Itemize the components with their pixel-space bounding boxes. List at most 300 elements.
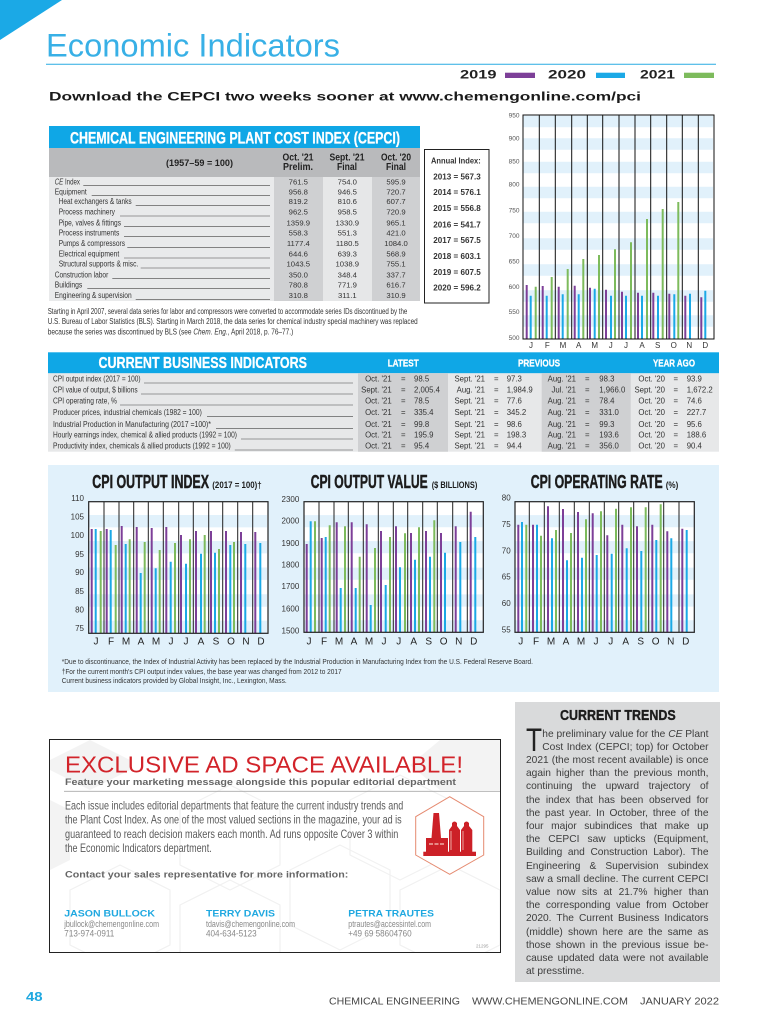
- year ago values: 74.6: [687, 396, 702, 406]
- latest values: 335.4: [414, 408, 434, 417]
- ad subhead: Feature your marketing message alongside this popular editorial department: [65, 777, 456, 787]
- CEPCI heading: CHEMICAL ENGINEERING PLANT COST INDEX (CEPCI): [70, 128, 400, 147]
- index values: 639.3: [338, 250, 357, 259]
- y axis labels: 550: [509, 309, 520, 316]
- annual index box: 2013 = 567.3: [433, 172, 481, 182]
- trends body text: cause updated data were not available: [526, 953, 708, 964]
- CEPCI footnote: because the series was discontinued by BLS (see Chem. Eng., April 2018, p. 76–77.): [48, 328, 294, 337]
- y axis labels: 80: [502, 493, 511, 502]
- x axis labels: J: [94, 636, 98, 648]
- index values: 421.0: [386, 228, 406, 237]
- legend: 2021: [640, 68, 675, 82]
- x axis labels: J: [518, 636, 523, 648]
- indicator labels: Productivity index, chemicals & allied products (1992 = 100): [53, 442, 231, 450]
- drop cap: T: [526, 722, 542, 758]
- x axis labels: D: [702, 341, 708, 350]
- x axis labels: [518, 636, 689, 648]
- previous values: two months back: Aug. '21: [548, 430, 576, 440]
- 2020 bars: [531, 289, 705, 339]
- x axis labels: M: [335, 636, 343, 648]
- index values: 965.1: [386, 218, 406, 227]
- x axis labels: O: [227, 636, 235, 648]
- index values: 754.0: [338, 177, 357, 186]
- x axis labels: D: [682, 636, 689, 648]
- trends body text: Cost Index (CEPCI; top) for October: [542, 742, 708, 753]
- latest values: 95.4: [414, 442, 430, 450]
- business indicators heading: CURRENT BUSINESS INDICATORS: [98, 355, 307, 372]
- icon: factory in hexagon: [416, 797, 484, 874]
- index values: 558.3: [289, 228, 308, 237]
- x axis labels: O: [440, 636, 448, 648]
- x axis labels: [529, 341, 708, 350]
- latest values: Oct. '21: [365, 396, 392, 406]
- index values: 810.6: [338, 197, 357, 206]
- previous values: one month back: =: [494, 408, 499, 417]
- previous values: two months back: Aug. '21: [548, 442, 576, 450]
- y axis labels: 105: [71, 513, 85, 522]
- x axis labels: N: [242, 636, 250, 648]
- column headings: LATEST: [388, 358, 419, 370]
- y axis labels: 1600: [282, 604, 300, 614]
- x axis labels: N: [455, 636, 462, 648]
- previous values: two months back: 1,966.0: [599, 386, 626, 394]
- chart: CPI operating rate: [502, 472, 694, 648]
- indicator labels: Hourly earnings index, chemical & allied products (1992 = 100): [53, 430, 237, 440]
- x axis labels: N: [686, 341, 692, 350]
- trends body text: the CEPCI saw upticks (Equipment,: [526, 834, 708, 845]
- ad body text: guaranteed to reach decision makers each month. Ad runs opposite Cover 3 within: [65, 827, 398, 841]
- row labels: Structural supports & misc.: [59, 260, 138, 269]
- previous values: two months back: Aug. '21: [548, 420, 576, 429]
- index values: 1330.9: [336, 218, 359, 227]
- contact: Jason Bullock: [64, 909, 159, 939]
- year ago values: [634, 374, 713, 450]
- contact: Terry Davis: TERRY DAVIS: [206, 909, 275, 919]
- contact: Jason Bullock: 713-974-0911: [64, 929, 114, 939]
- trends body text: Building and Construction Labor). The: [526, 847, 708, 858]
- previous values: one month back: [454, 374, 533, 450]
- y axis labels: 60: [502, 599, 511, 608]
- previous values: one month back: 198.3: [507, 430, 526, 440]
- row labels: CE Index: [55, 177, 80, 186]
- previous values: two months back: =: [585, 386, 590, 394]
- index values: 720.9: [386, 208, 406, 217]
- y axis labels: 70: [502, 547, 511, 556]
- x axis labels: M: [122, 636, 130, 648]
- index values: 771.9: [338, 280, 357, 289]
- 2019 bars: [527, 285, 701, 339]
- contact prompt: Contact your sales representative for more information:: [65, 869, 348, 879]
- row labels: [55, 177, 270, 300]
- annual index box: [424, 150, 489, 303]
- x axis labels: S: [655, 341, 660, 350]
- index values: 1084.0: [384, 239, 408, 248]
- y axis labels: 1500: [282, 626, 300, 636]
- latest values: Oct. '21: [365, 442, 392, 450]
- x axis labels: J: [396, 636, 401, 648]
- trends body text: 2021 (the most recent available) is once: [526, 755, 708, 766]
- x axis labels: J: [609, 341, 613, 350]
- 2021 bars: [536, 202, 678, 339]
- row labels: Heat exchangers & tanks: [59, 197, 132, 206]
- 2021 bars: [315, 520, 434, 632]
- download notice: Download the CEPCI two weeks sooner at www.chemengonline.com/pci: [49, 92, 641, 104]
- charts footnote: †For the current month's CPI output index values, the base year was changed from 2012 to 2017: [62, 667, 342, 676]
- y axis labels: [509, 112, 520, 342]
- ad body text: [65, 798, 403, 855]
- index values: 607.7: [386, 197, 406, 206]
- previous values: one month back: 97.3: [507, 374, 522, 384]
- previous values: two months back: 193.6: [599, 430, 619, 440]
- x axis labels: A: [351, 636, 358, 648]
- x axis labels: M: [547, 636, 555, 648]
- latest values: 78.5: [414, 396, 430, 406]
- previous values: two months back: =: [585, 420, 590, 429]
- previous values: two months back: Aug. '21: [548, 374, 576, 384]
- year ago values: =: [674, 386, 678, 394]
- 2019 bars: [307, 512, 471, 632]
- index values: 1180.5: [336, 239, 359, 248]
- y axis labels: 80: [75, 606, 85, 615]
- indicator labels: Producer prices, industrial chemicals (1982 = 100): [53, 408, 202, 417]
- previous values: one month back: Aug. '21: [457, 386, 485, 394]
- previous values: one month back: 98.6: [507, 420, 522, 429]
- x axis labels: A: [410, 636, 417, 648]
- trends heading: CURRENT TRENDS: [560, 708, 676, 724]
- x axis labels: [306, 636, 477, 648]
- trends body text: again higher than the previous month,: [526, 768, 708, 779]
- column headings: PREVIOUS: [518, 358, 560, 370]
- latest values: Oct. '21: [365, 374, 392, 384]
- column headers: Oct. '20: [381, 152, 411, 164]
- column headers: (1957–59 = 100): [166, 158, 233, 169]
- chart title: (2017 = 100)†: [212, 480, 262, 490]
- trends body text: those shown in the previous issue be-: [526, 940, 708, 951]
- trends body text: the corresponding value from October: [526, 900, 708, 911]
- previous values: one month back: =: [494, 430, 499, 440]
- column headers: Prelim.: [283, 162, 313, 173]
- annual index box: Annual Index:: [431, 156, 481, 166]
- charts footnote: [62, 657, 533, 685]
- trends body text: [526, 729, 708, 977]
- y axis labels: 55: [502, 625, 511, 634]
- index values: 616.7: [386, 280, 406, 289]
- latest values: 98.5: [414, 374, 430, 384]
- annual index box: 2015 = 556.8: [433, 203, 481, 213]
- trends body text: Engineering & Supervision subindex: [526, 861, 708, 872]
- index values: 755.1: [386, 260, 406, 269]
- latest values: Oct. '21: [365, 408, 392, 417]
- index values: 1177.4: [287, 239, 310, 248]
- year ago values: 93.9: [687, 374, 702, 384]
- 2019 bars: [518, 506, 682, 632]
- y axis labels: 2000: [282, 516, 300, 526]
- y axis labels: 600: [509, 284, 520, 291]
- previous values: one month back: Sept. '21: [454, 396, 485, 406]
- contact: Terry Davis: 404-634-5123: [206, 929, 257, 939]
- year ago values: =: [674, 374, 678, 384]
- previous values: two months back: 99.3: [599, 420, 614, 429]
- y axis labels: 950: [509, 112, 520, 119]
- x axis labels: F: [108, 636, 114, 648]
- latest values: Oct. '21: [365, 420, 392, 429]
- panel: advertisement: [49, 739, 501, 953]
- legend: [460, 68, 714, 82]
- year ago values: =: [674, 430, 678, 440]
- year ago values: 90.4: [687, 442, 703, 450]
- indicator labels: CPI output index (2017 = 100): [53, 374, 141, 384]
- ad body text: the Plant Cost Index. As one of the most valued sections in the magazine, your ad is: [65, 812, 402, 826]
- latest values: 99.8: [414, 420, 429, 429]
- row labels: Process machinery: [59, 208, 115, 217]
- x axis labels: F: [533, 636, 539, 648]
- column headers: Sept. '21: [330, 152, 365, 164]
- x axis labels: J: [382, 636, 386, 648]
- x axis labels: A: [198, 636, 205, 648]
- x axis labels: D: [257, 636, 265, 648]
- x axis labels: J: [306, 636, 312, 648]
- x axis labels: O: [671, 341, 677, 350]
- y axis labels: 850: [509, 158, 520, 165]
- corner accent triangle: [0, 0, 62, 40]
- column headings: [388, 358, 695, 370]
- latest values: Oct. '21: [365, 430, 392, 440]
- index values: 310.8: [289, 291, 308, 300]
- index values: 348.4: [338, 270, 358, 279]
- indicator labels: Industrial Production in Manufacturing (2017 =100)*: [53, 420, 211, 429]
- y axis labels: 75: [75, 624, 85, 633]
- previous values: two months back: 331.0: [599, 408, 619, 417]
- previous values: two months back: =: [585, 430, 590, 440]
- index values: 720.7: [386, 187, 406, 196]
- 2021 bars: [526, 504, 661, 632]
- panel: current business indicators: [48, 352, 719, 452]
- x axis labels: M: [365, 636, 373, 648]
- trends body text: the past year. In October, three of the: [526, 808, 708, 819]
- trends body text: four major subindices that make up: [526, 821, 708, 832]
- index values: 1359.9: [287, 218, 310, 227]
- contact: Jason Bullock: jbullock@chemengonline.com: [64, 919, 159, 929]
- index values: 956.8: [289, 187, 308, 196]
- row labels: Equipment: [55, 187, 87, 196]
- previous values: one month back: 345.2: [507, 408, 526, 417]
- latest values: =: [401, 374, 406, 384]
- row labels: Process instruments: [59, 228, 119, 237]
- ad body text: Each issue includes editorial departments that feature the current industry trends and: [65, 798, 403, 812]
- row labels: Pumps & compressors: [59, 239, 125, 248]
- x axis labels: M: [577, 636, 585, 648]
- year ago values: =: [674, 442, 678, 450]
- indicator labels: CPI value of output, $ billions: [53, 386, 138, 394]
- latest values: Sept. '21: [361, 386, 392, 394]
- previous values: one month back: =: [494, 420, 499, 429]
- x axis labels: J: [594, 636, 598, 648]
- previous values: two months back: [548, 374, 626, 450]
- previous values: one month back: Sept. '21: [454, 408, 485, 417]
- x axis labels: J: [529, 341, 533, 350]
- index values: 780.8: [289, 280, 308, 289]
- year ago values: 227.7: [687, 408, 706, 417]
- previous values: one month back: 94.4: [507, 442, 523, 450]
- year ago values: 1,672.2: [687, 386, 713, 394]
- index values: 819.2: [289, 197, 308, 206]
- previous values: one month back: 1,984.9: [507, 386, 533, 394]
- latest values: =: [401, 386, 406, 394]
- x axis labels: F: [545, 341, 550, 350]
- x axis labels: N: [667, 636, 674, 648]
- y axis labels: 900: [509, 136, 520, 143]
- y axis labels: 800: [509, 182, 520, 189]
- index values: 568.9: [386, 250, 406, 259]
- CEPCI footnote: U.S. Bureau of Labor Statistics (BLS). Starting in March 2018, the data series for chemical industry special machinery was replaced: [48, 317, 418, 326]
- page number: 48: [26, 990, 43, 1004]
- previous values: two months back: =: [585, 396, 590, 406]
- year ago values: 188.6: [687, 430, 706, 440]
- x axis labels: A: [576, 341, 582, 350]
- latest values: =: [401, 420, 406, 429]
- index values: 644.6: [289, 250, 308, 259]
- chart: CEPCI monthly bars: [509, 112, 714, 350]
- contact: Petra Trautes: PETRA TRAUTES: [348, 909, 434, 919]
- x axis labels: M: [591, 341, 598, 350]
- chart title: CPI OPERATING RATE: [531, 472, 663, 492]
- x axis labels: M: [560, 341, 567, 350]
- x axis labels: O: [652, 636, 660, 648]
- 2020 bars: [311, 521, 475, 632]
- x axis labels: S: [425, 636, 432, 648]
- trends body text: value now sits at 21.7% higher than: [526, 887, 708, 898]
- year ago values: Oct. '20: [638, 420, 666, 429]
- y axis labels: 90: [75, 568, 85, 577]
- x axis labels: F: [321, 636, 327, 648]
- index values: 946.5: [338, 187, 357, 196]
- latest values: [361, 374, 441, 450]
- latest values: =: [401, 408, 406, 417]
- contact: Terry Davis: [206, 909, 295, 939]
- y axis labels: 1800: [282, 560, 300, 570]
- y axis labels: 1700: [282, 582, 300, 591]
- trends body text: continuing the upward trajectory of: [526, 781, 708, 792]
- column headers: Oct. '21: [282, 152, 314, 164]
- y axis labels: 65: [502, 573, 511, 582]
- column headers: [166, 152, 411, 173]
- latest values: =: [401, 442, 406, 450]
- previous values: one month back: Sept. '21: [454, 430, 485, 440]
- year ago values: =: [674, 396, 678, 406]
- row labels: Pipe, valves & fittings: [59, 218, 121, 227]
- y axis labels: 85: [75, 587, 85, 596]
- row labels: Buildings: [55, 280, 82, 289]
- contact: Terry Davis: tdavis@chemengonline.com: [206, 919, 295, 929]
- CEPCI footnote: Starting in April 2007, several data series for labor and compressors were converted to accommodate series IDs discontinued by the: [48, 307, 408, 316]
- legend: 2019: [460, 68, 497, 82]
- year ago values: Oct. '20: [638, 408, 666, 417]
- x axis labels: S: [213, 636, 220, 648]
- contact: Petra Trautes: +49 69 58604760: [348, 929, 412, 939]
- previous values: one month back: =: [494, 374, 499, 384]
- x axis labels: A: [622, 636, 629, 648]
- index values: 595.9: [386, 177, 406, 186]
- x axis labels: M: [152, 636, 160, 648]
- footer: JANUARY 2022: [640, 995, 719, 1007]
- year ago values: Oct. '20: [638, 396, 666, 406]
- previous values: one month back: =: [494, 396, 499, 406]
- index values: 350.0: [289, 270, 308, 279]
- previous values: one month back: =: [494, 386, 499, 394]
- latest values: =: [401, 430, 406, 440]
- previous values: one month back: Sept. '21: [454, 420, 485, 429]
- footer: CHEMICAL ENGINEERING: [329, 995, 460, 1007]
- x axis labels: J: [608, 636, 613, 648]
- trends body text: at presstime.: [526, 966, 584, 977]
- y axis labels: 750: [509, 207, 520, 214]
- panel: CPI charts: [48, 465, 719, 692]
- previous values: two months back: 78.4: [599, 396, 615, 406]
- index values: 337.7: [386, 270, 406, 279]
- index values: 761.5: [289, 177, 308, 186]
- y axis labels: 75: [502, 520, 511, 529]
- annual index box: 2019 = 607.5: [433, 267, 481, 277]
- x axis labels: [94, 636, 265, 648]
- trends body text: 2020. The Current Business Indicators: [526, 913, 708, 924]
- year ago values: Oct. '20: [638, 374, 666, 384]
- x axis labels: J: [168, 636, 174, 648]
- previous values: two months back: 356.0: [599, 442, 619, 450]
- annual index box: 2018 = 603.1: [433, 251, 481, 261]
- indicator labels: [53, 374, 353, 450]
- previous values: one month back: Sept. '21: [454, 442, 485, 450]
- column headings: YEAR AGO: [653, 358, 695, 370]
- column headers: Final: [386, 162, 406, 173]
- contact: Petra Trautes: [348, 909, 434, 939]
- row labels: Electrical equipment: [59, 250, 120, 259]
- previous values: two months back: =: [585, 408, 590, 417]
- year ago values: Sept. '20: [634, 386, 666, 394]
- latest values: =: [401, 396, 406, 406]
- contact: Jason Bullock: JASON BULLOCK: [64, 909, 156, 919]
- 2021 bars: [101, 531, 234, 633]
- index values: 1043.5: [287, 260, 310, 269]
- index values: 311.1: [338, 291, 357, 300]
- x axis labels: D: [470, 636, 477, 648]
- footer: WWW.CHEMENGONLINE.COM: [472, 995, 628, 1007]
- x axis labels: A: [138, 636, 145, 648]
- chart title: ($ BILLIONS): [432, 480, 477, 490]
- previous values: two months back: =: [585, 442, 590, 450]
- chart title: CPI OUTPUT INDEX: [92, 472, 209, 492]
- 2020 bars: [522, 522, 687, 632]
- previous values: one month back: 77.6: [507, 396, 522, 406]
- ad body text: the Economic Indicators department.: [65, 841, 212, 855]
- y axis labels: 500: [509, 335, 520, 342]
- title: Economic Indicators: [46, 28, 340, 64]
- y axis labels: 100: [71, 531, 85, 540]
- contact: Petra Trautes: ptrautes@accessintel.com: [348, 919, 431, 929]
- row labels: Engineering & supervision: [55, 291, 132, 300]
- row labels: Construction labor: [55, 270, 109, 279]
- panel: advertisement: 21295: [476, 944, 489, 948]
- x axis labels: J: [624, 341, 628, 350]
- year ago values: =: [674, 420, 678, 429]
- chart: CPI output index: [71, 472, 268, 648]
- column headers: Final: [337, 162, 357, 173]
- annual index box: 2016 = 541.7: [433, 220, 481, 230]
- previous values: two months back: Jul. '21: [552, 386, 576, 394]
- year ago values: Oct. '20: [638, 442, 666, 450]
- index values: 962.5: [289, 208, 308, 217]
- indicator labels: CPI operating rate, %: [53, 396, 117, 406]
- y axis labels: 110: [71, 494, 85, 503]
